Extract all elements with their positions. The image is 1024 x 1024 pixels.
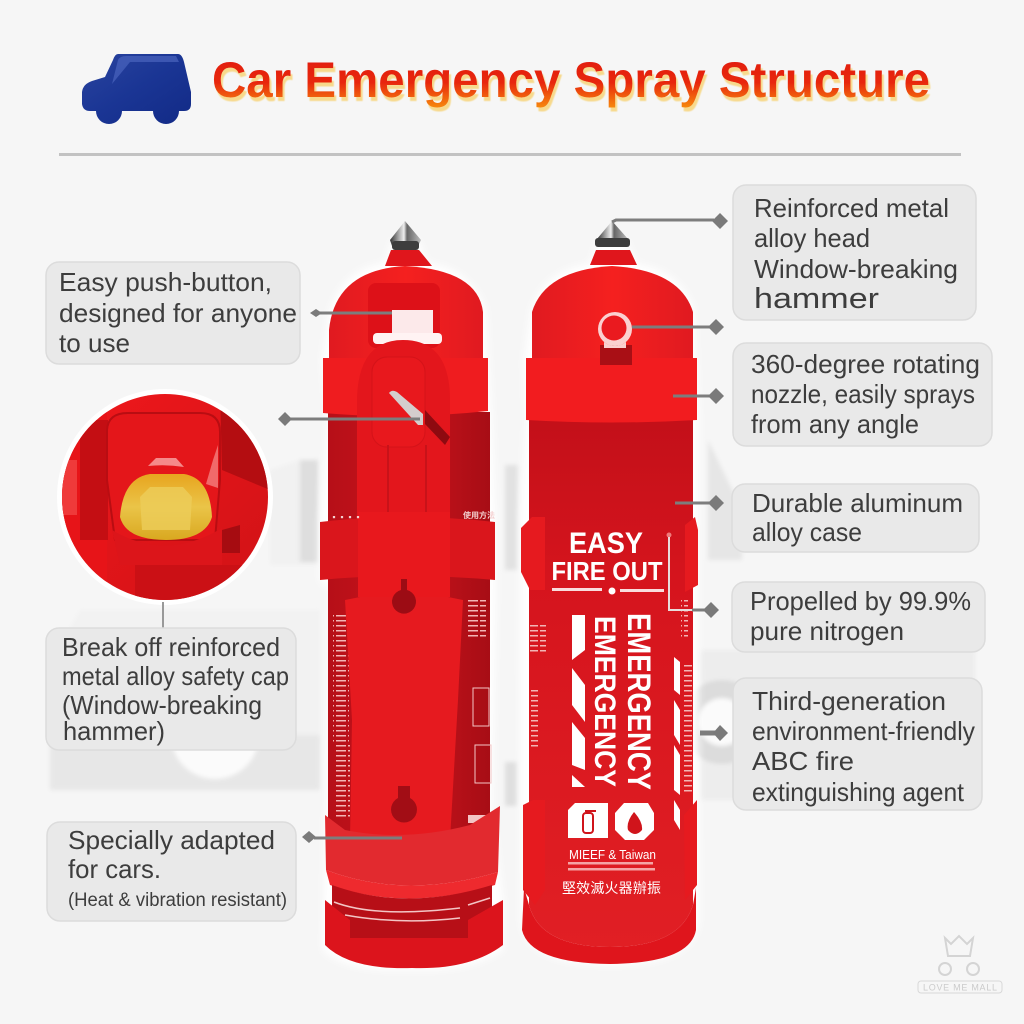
- panel: car adapted: [47, 822, 296, 921]
- panel: nitrogen: Propelled by 99.9%: [750, 586, 971, 616]
- header divider: [59, 153, 961, 156]
- tiny band text: ▪▪▪▪: [330, 512, 362, 523]
- connector: rotating nozzle: [632, 319, 724, 335]
- highlight: [148, 458, 184, 467]
- panel: fire agent: extinguishing agent: [752, 777, 965, 807]
- faded car background: [50, 440, 975, 806]
- title: car icon: [82, 54, 191, 124]
- panel: safety cap: Break off reinforced: [62, 632, 280, 662]
- hammer spike: [595, 221, 630, 247]
- panel: safety cap: (Window-breaking: [62, 690, 262, 720]
- easy fire out label: FIRE OUT: [552, 556, 663, 586]
- connector: safety cap: [278, 412, 420, 426]
- hammer spike: [390, 221, 421, 250]
- panel: car adapted: for cars.: [68, 854, 161, 884]
- extinguisher: front view: [520, 221, 699, 965]
- panel: push button: Easy push-button,: [59, 267, 272, 297]
- panel: fire agent: ABC fire: [752, 746, 854, 776]
- connector: cap to caption: [162, 602, 164, 628]
- panel: reinforced metal head: Reinforced metal: [754, 193, 949, 223]
- panel: aluminum case: Durable aluminum: [752, 488, 963, 518]
- panel: nitrogen: [732, 582, 985, 652]
- connector: car mount: [302, 831, 402, 843]
- panel: safety cap: [46, 628, 296, 750]
- panel: fire agent: [733, 678, 982, 810]
- panel: fire agent: environment-friendly: [752, 716, 975, 746]
- pull tab: [389, 391, 423, 425]
- small print: [568, 862, 655, 870]
- connector: nozzle angle: [673, 388, 724, 404]
- panel: car adapted: Specially adapted: [68, 825, 275, 855]
- upper band: [320, 517, 495, 580]
- panel: reinforced metal head: Window-breaking: [754, 254, 958, 284]
- panel: rotating nozzle: nozzle, easily sprays: [751, 379, 975, 409]
- label band: [332, 885, 492, 938]
- easy fire out label: EASY: [569, 527, 643, 560]
- bracket strap: [357, 340, 450, 525]
- side clips: [521, 517, 698, 905]
- panel: aluminum case: [732, 484, 979, 552]
- detail circle: safety cap: [57, 389, 273, 605]
- yellow valve: [120, 474, 212, 540]
- watermark logo: [918, 936, 1002, 993]
- connector: nitrogen: [666, 532, 719, 618]
- icon: fire badge: [615, 803, 654, 840]
- printed side labels: [333, 600, 491, 823]
- panel: push button: designed for anyone: [59, 298, 297, 328]
- dome cap: [329, 266, 483, 360]
- white stripes: [572, 615, 680, 830]
- panel: safety cap: metal alloy safety cap: [62, 661, 289, 691]
- panel: rotating nozzle: 360-degree rotating: [751, 349, 980, 379]
- panel: fire agent: Third-generation: [752, 686, 946, 716]
- panel: rotating nozzle: from any angle: [751, 409, 919, 439]
- collar: [526, 358, 697, 422]
- connector: push button: [310, 309, 392, 317]
- easy fire out label: [552, 527, 664, 594]
- connector: metal head: [612, 213, 728, 229]
- vertical emergency text: EMERGENCY: [621, 613, 657, 790]
- vertical emergency text: EMERGENCY: [588, 616, 621, 787]
- keyhole upper: [392, 579, 416, 614]
- title: Car Emergency Spray Structure: [212, 52, 930, 108]
- base label lines: [334, 898, 490, 921]
- body tube: [328, 412, 490, 832]
- white push button: [373, 310, 442, 344]
- watermark logo: LOVE ME MALL: [923, 982, 997, 992]
- connector: fire agent: [700, 725, 728, 741]
- dome cap: [532, 266, 693, 362]
- panel: safety cap: hammer): [63, 716, 165, 746]
- lower ring: [325, 806, 500, 886]
- icon: extinguisher badge: [568, 803, 608, 838]
- nozzle: [598, 312, 632, 365]
- extinguisher: back view: [320, 221, 503, 970]
- button window: [368, 283, 440, 348]
- base: [325, 900, 503, 968]
- tiny band text: [330, 510, 495, 523]
- vertical emergency text: [588, 613, 657, 790]
- wide bracket: [345, 597, 463, 840]
- certification text: MIEEF & Taiwan: [569, 847, 656, 862]
- tiny band text: 使用方法: [463, 510, 495, 521]
- connector: aluminum case: [675, 495, 724, 511]
- aluminum body: [529, 418, 693, 947]
- printed side strips: [530, 600, 692, 795]
- keyhole lower: [391, 786, 417, 823]
- valve seat: [112, 530, 217, 541]
- chinese label: 堅效滅火器辦振: [562, 880, 661, 896]
- panel: reinforced metal head: alloy head: [754, 223, 870, 253]
- panel: reinforced metal head: [733, 185, 976, 320]
- panel: rotating nozzle: [733, 343, 992, 446]
- panel: push button: to use: [59, 328, 130, 358]
- panel: car adapted: (Heat & vibration resistant): [68, 890, 287, 911]
- panel: push button: [46, 262, 300, 364]
- base: [522, 888, 696, 964]
- panel: aluminum case: alloy case: [752, 517, 862, 547]
- panel: nitrogen: pure nitrogen: [750, 616, 904, 646]
- panel: reinforced metal head: hammer: [754, 283, 879, 315]
- collar: [323, 358, 488, 416]
